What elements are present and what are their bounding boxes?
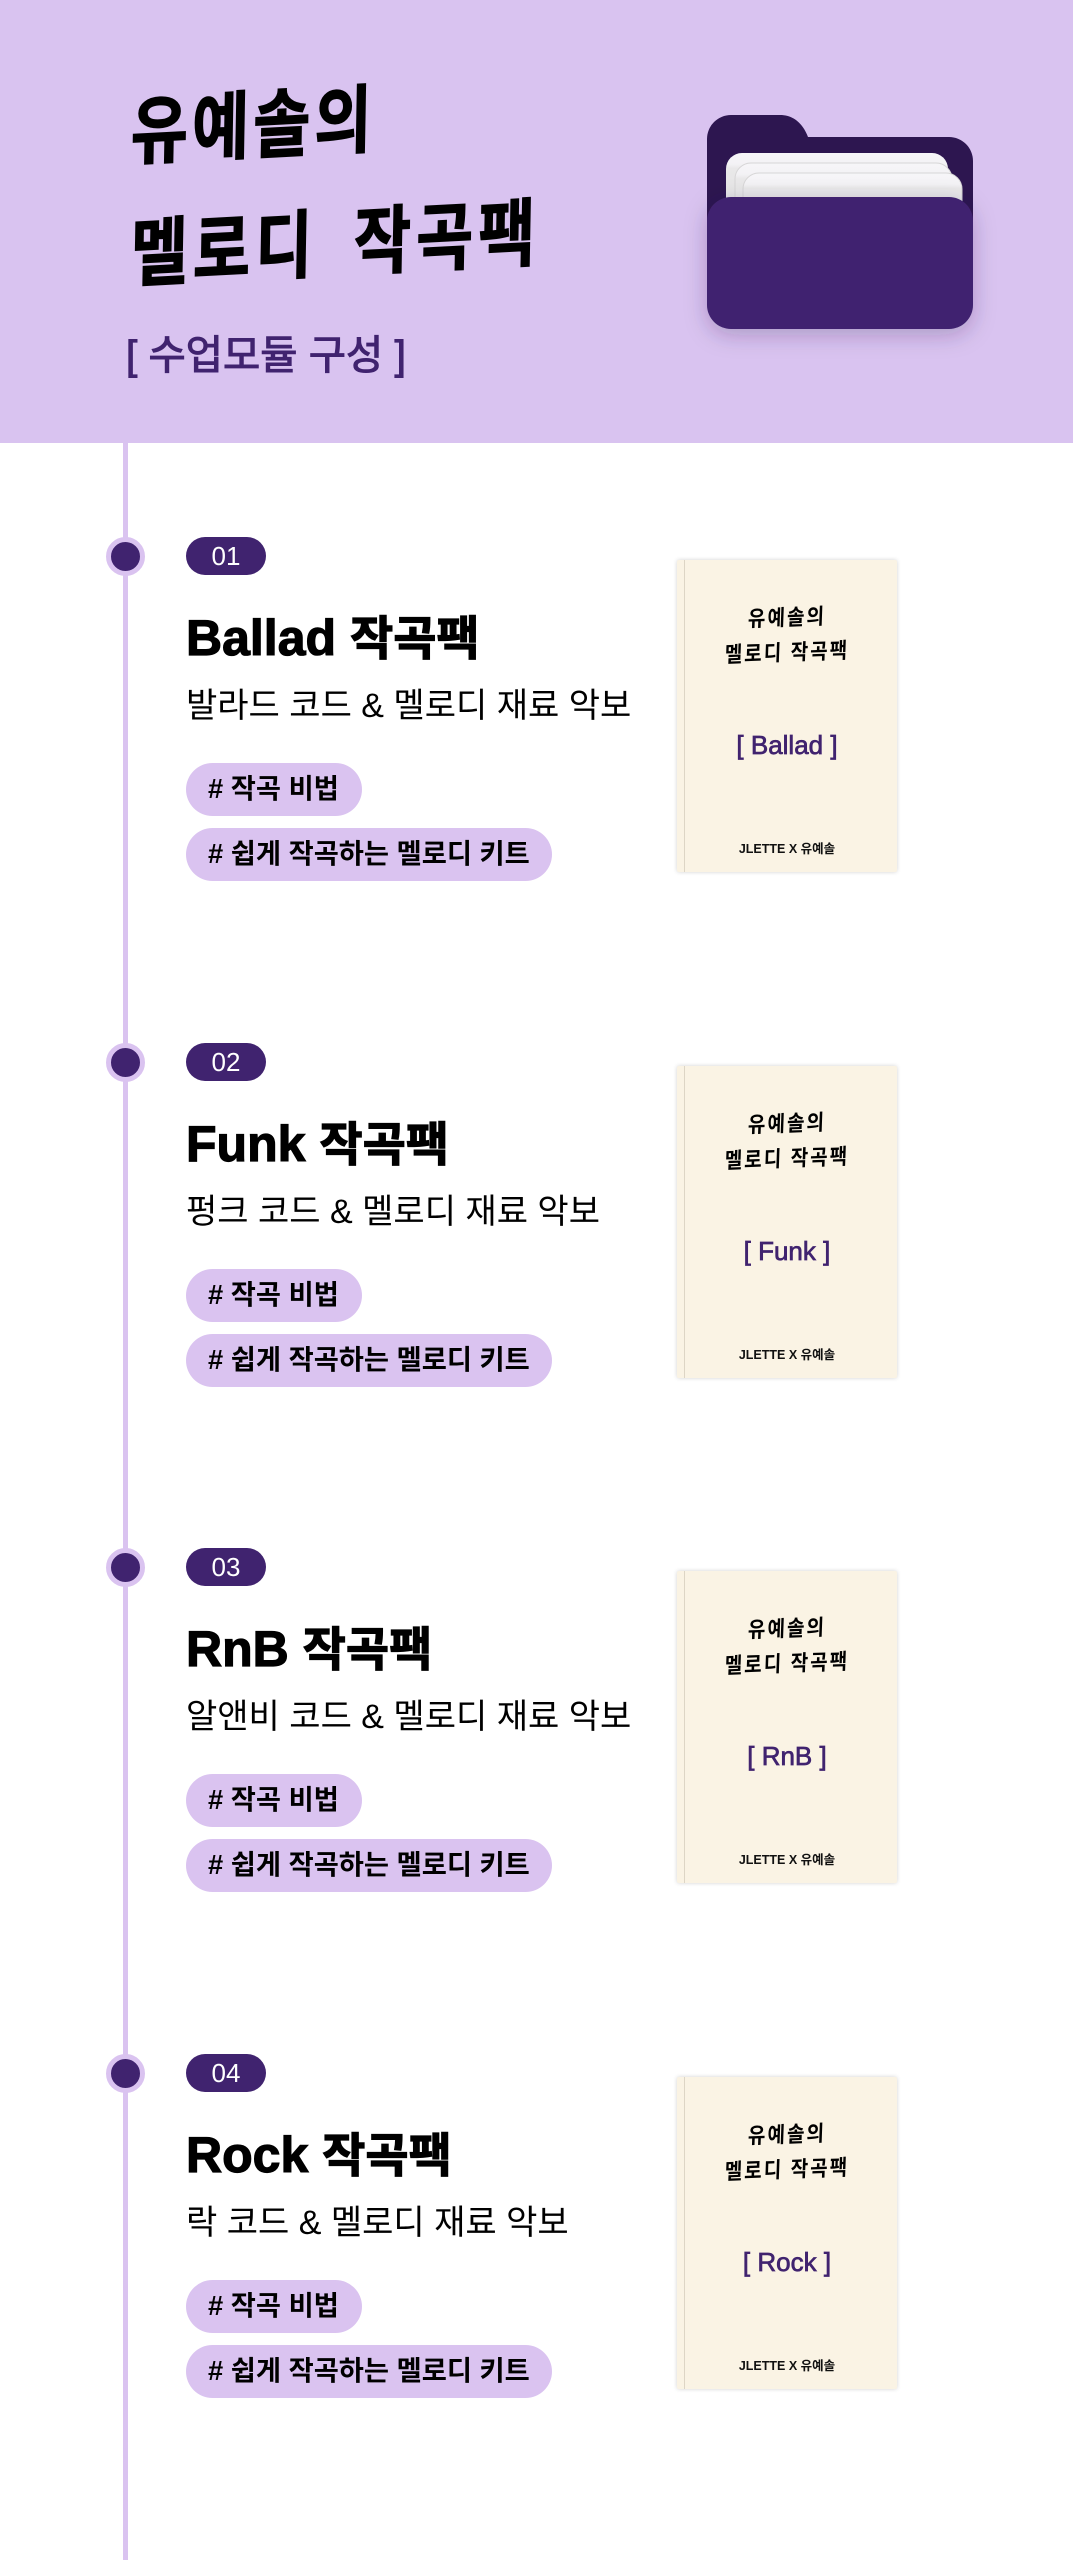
book cover: JLETTE X 유예솔 (739, 842, 835, 856)
book cover: [ Funk ] (744, 1236, 830, 1266)
timeline dot (106, 1043, 145, 1082)
book cover (677, 560, 897, 872)
number badge (186, 1043, 266, 1081)
book cover: [ Rock ] (743, 2247, 831, 2277)
tag: secret (186, 763, 362, 816)
tag: kit (186, 1839, 552, 1892)
subtitle: [ 수업모듈 구성 ] (126, 332, 406, 378)
panel: module 04 (106, 2054, 899, 2398)
tag: secret: # 작곡 비법 (208, 1279, 339, 1310)
panel: module 02 (106, 1043, 899, 1387)
number badge: 02 (212, 1047, 240, 1077)
title line 1: 유예솔의 (130, 59, 377, 180)
number badge: 04 (212, 2058, 240, 2088)
book cover: JLETTE X 유예솔 (739, 2359, 835, 2373)
timeline line (123, 443, 128, 2560)
book cover: 유예솔의 (747, 2117, 827, 2150)
heading: Funk 작곡팩 (186, 1116, 449, 1172)
tag: kit (186, 1334, 552, 1387)
tag: secret: # 작곡 비법 (208, 2290, 339, 2321)
book cover: 멜로디 작곡팩 (724, 1140, 850, 1175)
title line 2: 멜로디 작곡팩 (130, 173, 541, 302)
tag: kit: # 쉽게 작곡하는 멜로디 키트 (208, 838, 530, 869)
timeline dot (106, 2054, 145, 2093)
book cover: 유예솔의 (747, 1611, 827, 1644)
timeline dot (106, 537, 145, 576)
description: 발라드 코드 & 멜로디 재료 악보 (186, 687, 631, 725)
tag: kit (186, 2345, 552, 2398)
tag: secret (186, 2280, 362, 2333)
timeline dot (106, 1548, 145, 1587)
tag: secret: # 작곡 비법 (208, 1784, 339, 1815)
tag: kit (186, 828, 552, 881)
heading: Ballad 작곡팩 (186, 610, 480, 666)
number badge (186, 537, 266, 575)
icon: folder with papers (696, 115, 984, 346)
tag: kit: # 쉽게 작곡하는 멜로디 키트 (208, 2355, 530, 2386)
book cover: 유예솔의 (747, 1106, 827, 1139)
tag: kit: # 쉽게 작곡하는 멜로디 키트 (208, 1344, 530, 1375)
panel: module 01 (106, 537, 899, 881)
book cover: 유예솔의 (747, 600, 827, 633)
header banner (0, 0, 1073, 443)
number badge: 03 (212, 1552, 240, 1582)
book cover: 멜로디 작곡팩 (724, 2151, 850, 2186)
book cover: [ Ballad ] (736, 730, 838, 760)
description: 알앤비 코드 & 멜로디 재료 악보 (186, 1698, 631, 1736)
book cover: [ RnB ] (747, 1741, 827, 1771)
book cover (677, 2077, 897, 2389)
tag: secret (186, 1774, 362, 1827)
book cover (677, 1066, 897, 1378)
panel: module 03 (106, 1548, 899, 1892)
tag: secret (186, 1269, 362, 1322)
number badge (186, 1548, 266, 1586)
heading: RnB 작곡팩 (186, 1621, 432, 1677)
number badge: 01 (212, 541, 240, 571)
tag: secret: # 작곡 비법 (208, 773, 339, 804)
description: 펑크 코드 & 멜로디 재료 악보 (186, 1193, 600, 1231)
book cover: JLETTE X 유예솔 (739, 1348, 835, 1362)
heading: Rock 작곡팩 (186, 2127, 452, 2183)
description: 락 코드 & 멜로디 재료 악보 (186, 2204, 569, 2242)
book cover: JLETTE X 유예솔 (739, 1853, 835, 1867)
book cover (677, 1571, 897, 1883)
book cover: 멜로디 작곡팩 (724, 1645, 850, 1680)
tag: kit: # 쉽게 작곡하는 멜로디 키트 (208, 1849, 530, 1880)
number badge (186, 2054, 266, 2092)
book cover: 멜로디 작곡팩 (724, 634, 850, 669)
